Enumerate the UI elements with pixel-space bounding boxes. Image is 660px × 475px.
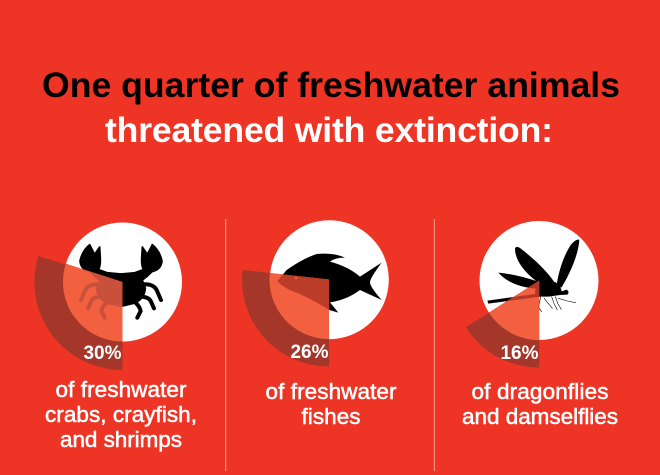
- percentage: 26%: 26%: [290, 342, 329, 363]
- label: fishes: [266, 379, 397, 429]
- title: One quarter of freshwater animals: [42, 65, 620, 105]
- pie circle: dragonflies: [480, 221, 598, 340]
- label: dragonflies: of dragonflies: [472, 379, 608, 404]
- label: crabs: and shrimps: [60, 427, 182, 452]
- percentage: 16%: 16%: [500, 343, 539, 364]
- label: fishes: of freshwater: [266, 379, 397, 404]
- title: [42, 65, 620, 150]
- panel: fishes: [242, 220, 397, 429]
- label: crabs: crabs, crayfish,: [45, 402, 197, 427]
- icon: fish: [277, 254, 382, 313]
- wedge: 26 percent: [242, 270, 329, 366]
- label: crabs: of freshwater: [56, 377, 187, 402]
- icon: dragonfly: [487, 240, 579, 312]
- label: dragonflies: and damselflies: [462, 404, 618, 429]
- pie circle: fishes: [270, 220, 389, 339]
- percentage: 30%: 30%: [83, 343, 122, 364]
- label: fishes: fishes: [302, 404, 360, 429]
- label: dragonflies: [462, 379, 618, 429]
- wedge: 30 percent: [34, 256, 122, 370]
- panel: dragonflies: [462, 221, 618, 429]
- pie circle: crabs: [63, 222, 182, 342]
- icon: crab: [80, 245, 162, 318]
- title: threatened with extinction:: [105, 110, 553, 150]
- panel: crabs: [34, 222, 197, 452]
- label: crabs: [45, 377, 197, 452]
- wedge: 16 percent: [466, 280, 540, 368]
